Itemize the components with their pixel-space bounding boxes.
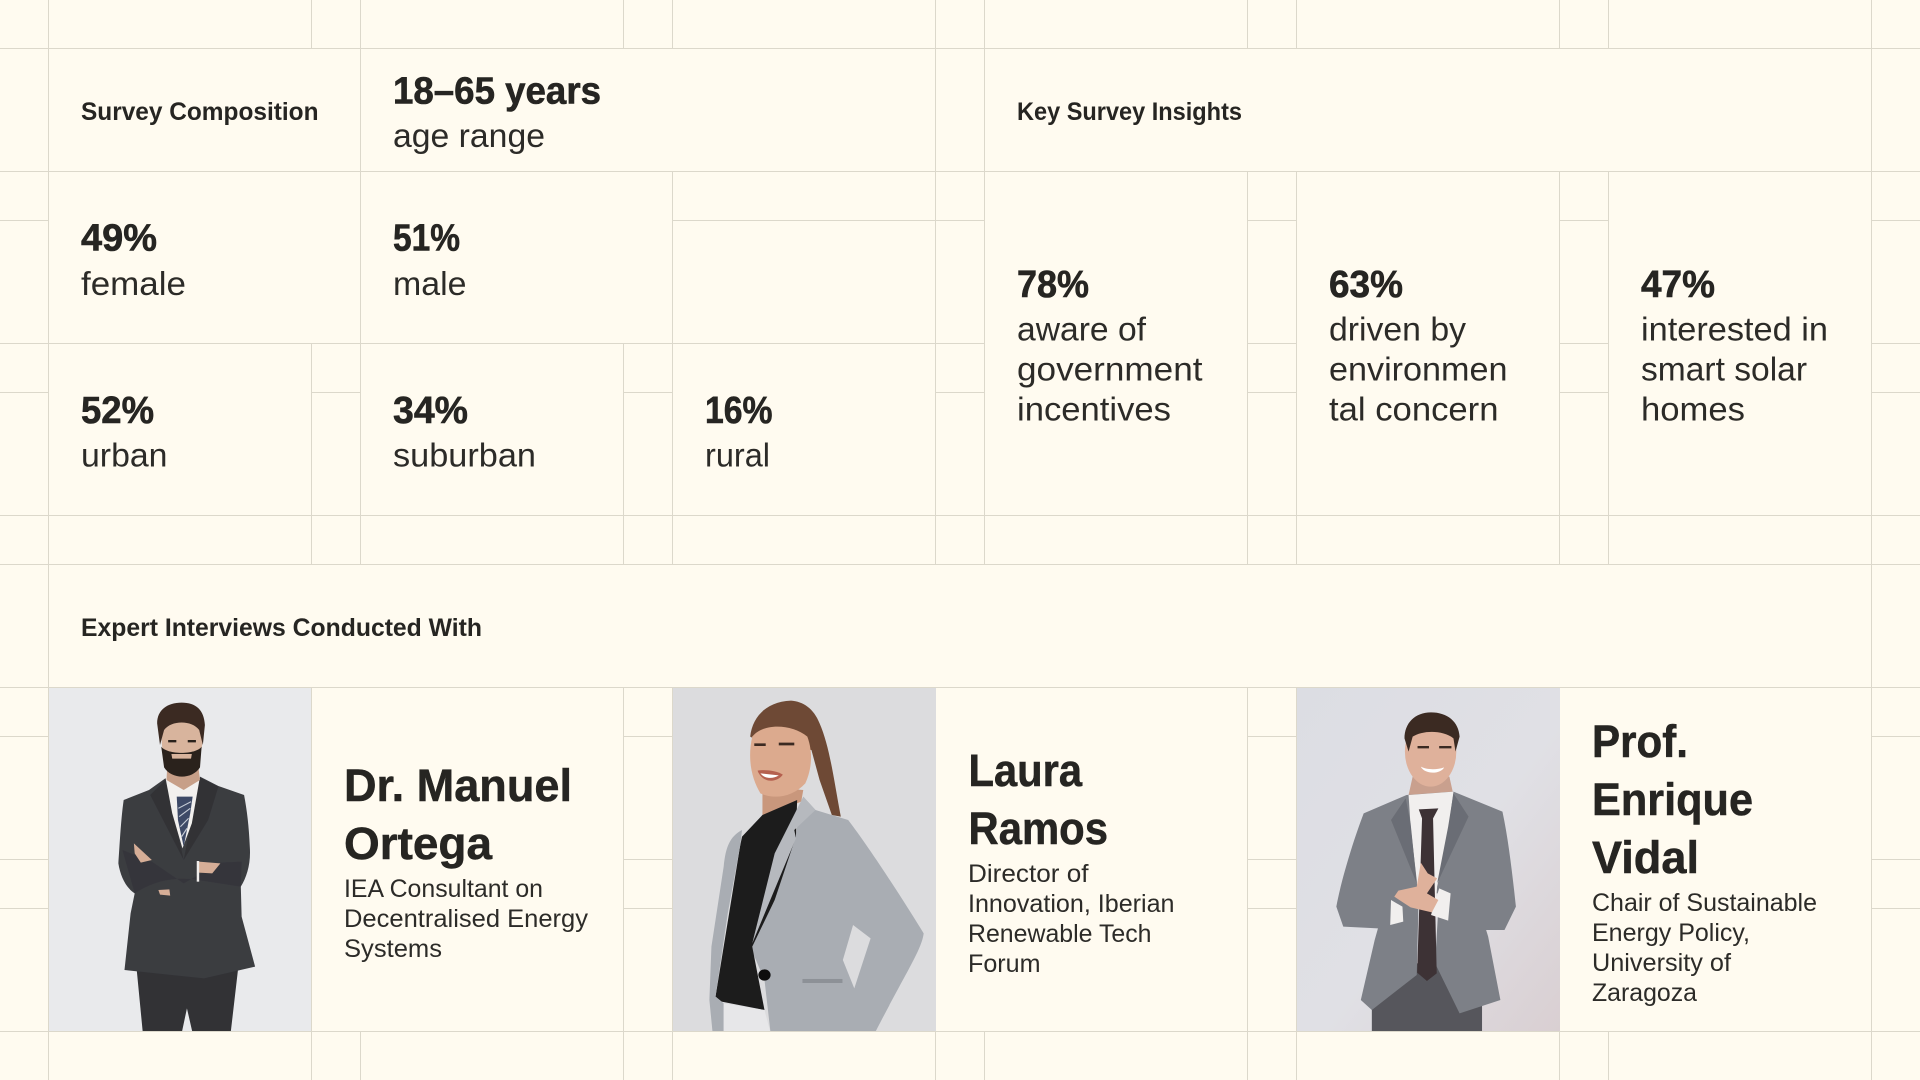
role: Laura Ramos: Forum (968, 950, 1040, 978)
panel: insight government incentives: aware of (1017, 310, 1147, 348)
panel: Enrique Vidal bio (1560, 688, 1871, 1031)
name: Dr. Manuel Ortega: Dr. Manuel (344, 760, 572, 811)
name: Dr. Manuel Ortega: Ortega (344, 818, 493, 869)
panel: suburban share (361, 344, 623, 515)
role: Laura Ramos (968, 860, 1174, 978)
role: Manuel Ortega (344, 875, 589, 963)
panel: age range (361, 49, 935, 171)
panel: urban share: urban (81, 436, 168, 474)
panel: expert interviews heading: Expert Interviews Conducted With (81, 614, 482, 642)
name: Dr. Manuel Ortega (344, 760, 572, 869)
panel: urban share: 52% (81, 390, 154, 432)
photo: Laura Ramos (673, 688, 936, 1033)
name: Enrique Vidal: Prof. (1592, 716, 1688, 767)
panel: urban share (49, 344, 311, 515)
panel: insight smart solar homes: homes (1641, 390, 1745, 428)
panel: key survey insights heading: Key Survey Insights (1017, 98, 1242, 126)
name: Laura Ramos: Ramos (968, 803, 1108, 854)
panel: survey composition heading (49, 49, 360, 171)
panel: insight government incentives: incentives (1017, 390, 1171, 428)
role: Enrique Vidal: University of (1592, 949, 1731, 977)
panel: insight smart solar homes: smart solar (1641, 350, 1807, 388)
role: Manuel Ortega: Systems (344, 935, 442, 963)
role: Enrique Vidal: Energy Policy, (1592, 919, 1750, 947)
role: Manuel Ortega: Decentralised Energy (344, 905, 589, 933)
role: Enrique Vidal (1592, 889, 1817, 1007)
role: Enrique Vidal: Zaragoza (1592, 979, 1697, 1007)
panel: female share (49, 172, 360, 343)
stat value: age range: 18–65 years (393, 70, 601, 112)
name: Enrique Vidal (1592, 716, 1753, 883)
photo: Dr. Manuel Ortega (49, 688, 311, 1033)
role: Enrique Vidal: Chair of Sustainable (1592, 889, 1817, 917)
name: Laura Ramos (968, 745, 1108, 854)
name: Enrique Vidal: Enrique (1592, 774, 1753, 825)
panel: male share: 51% (393, 218, 460, 260)
panel: male share: male (393, 265, 466, 302)
panel: rural share (673, 344, 935, 515)
panel: insight government incentives: 78% (1017, 264, 1089, 306)
panel: key survey insights heading (985, 49, 1871, 171)
panel: insight environmental concern: driven by (1329, 310, 1467, 348)
role: Manuel Ortega: IEA Consultant on (344, 875, 543, 903)
panel: insight environmental concern: environmen (1329, 350, 1508, 388)
panel: insight environmental concern (1297, 172, 1559, 515)
panel: expert interviews heading (49, 565, 1871, 687)
panel: Manuel Ortega bio (312, 688, 623, 1031)
panel: suburban share: 34% (393, 390, 468, 432)
panel: insight smart solar homes: interested in (1641, 310, 1828, 348)
role: Laura Ramos: Renewable Tech (968, 920, 1152, 948)
panel: insight smart solar homes: 47% (1641, 264, 1715, 306)
role: Laura Ramos: Director of (968, 860, 1089, 888)
panel: suburban share: suburban (393, 436, 536, 474)
panel: insight environmental concern: tal concern (1329, 390, 1498, 428)
panel: survey composition heading: Survey Composition (81, 98, 318, 126)
panel: female share: female (81, 265, 186, 302)
panel: female share: 49% (81, 218, 157, 260)
panel: rural share: rural (705, 436, 770, 474)
role: Laura Ramos: Innovation, Iberian (968, 890, 1174, 918)
panel: insight environmental concern: 63% (1329, 264, 1403, 306)
name: Laura Ramos: Laura (968, 745, 1083, 796)
name: Enrique Vidal: Vidal (1592, 832, 1699, 883)
panel: male share (361, 172, 672, 343)
photo: Prof. Enrique Vidal (1297, 688, 1560, 1033)
panel: insight government incentives (985, 172, 1247, 515)
panel: rural share: 16% (705, 390, 772, 432)
panel: insight government incentives: government (1017, 350, 1202, 388)
panel: insight smart solar homes (1609, 172, 1871, 515)
stat label: age range: age range (393, 117, 545, 154)
panel: Laura Ramos bio (936, 688, 1247, 1031)
